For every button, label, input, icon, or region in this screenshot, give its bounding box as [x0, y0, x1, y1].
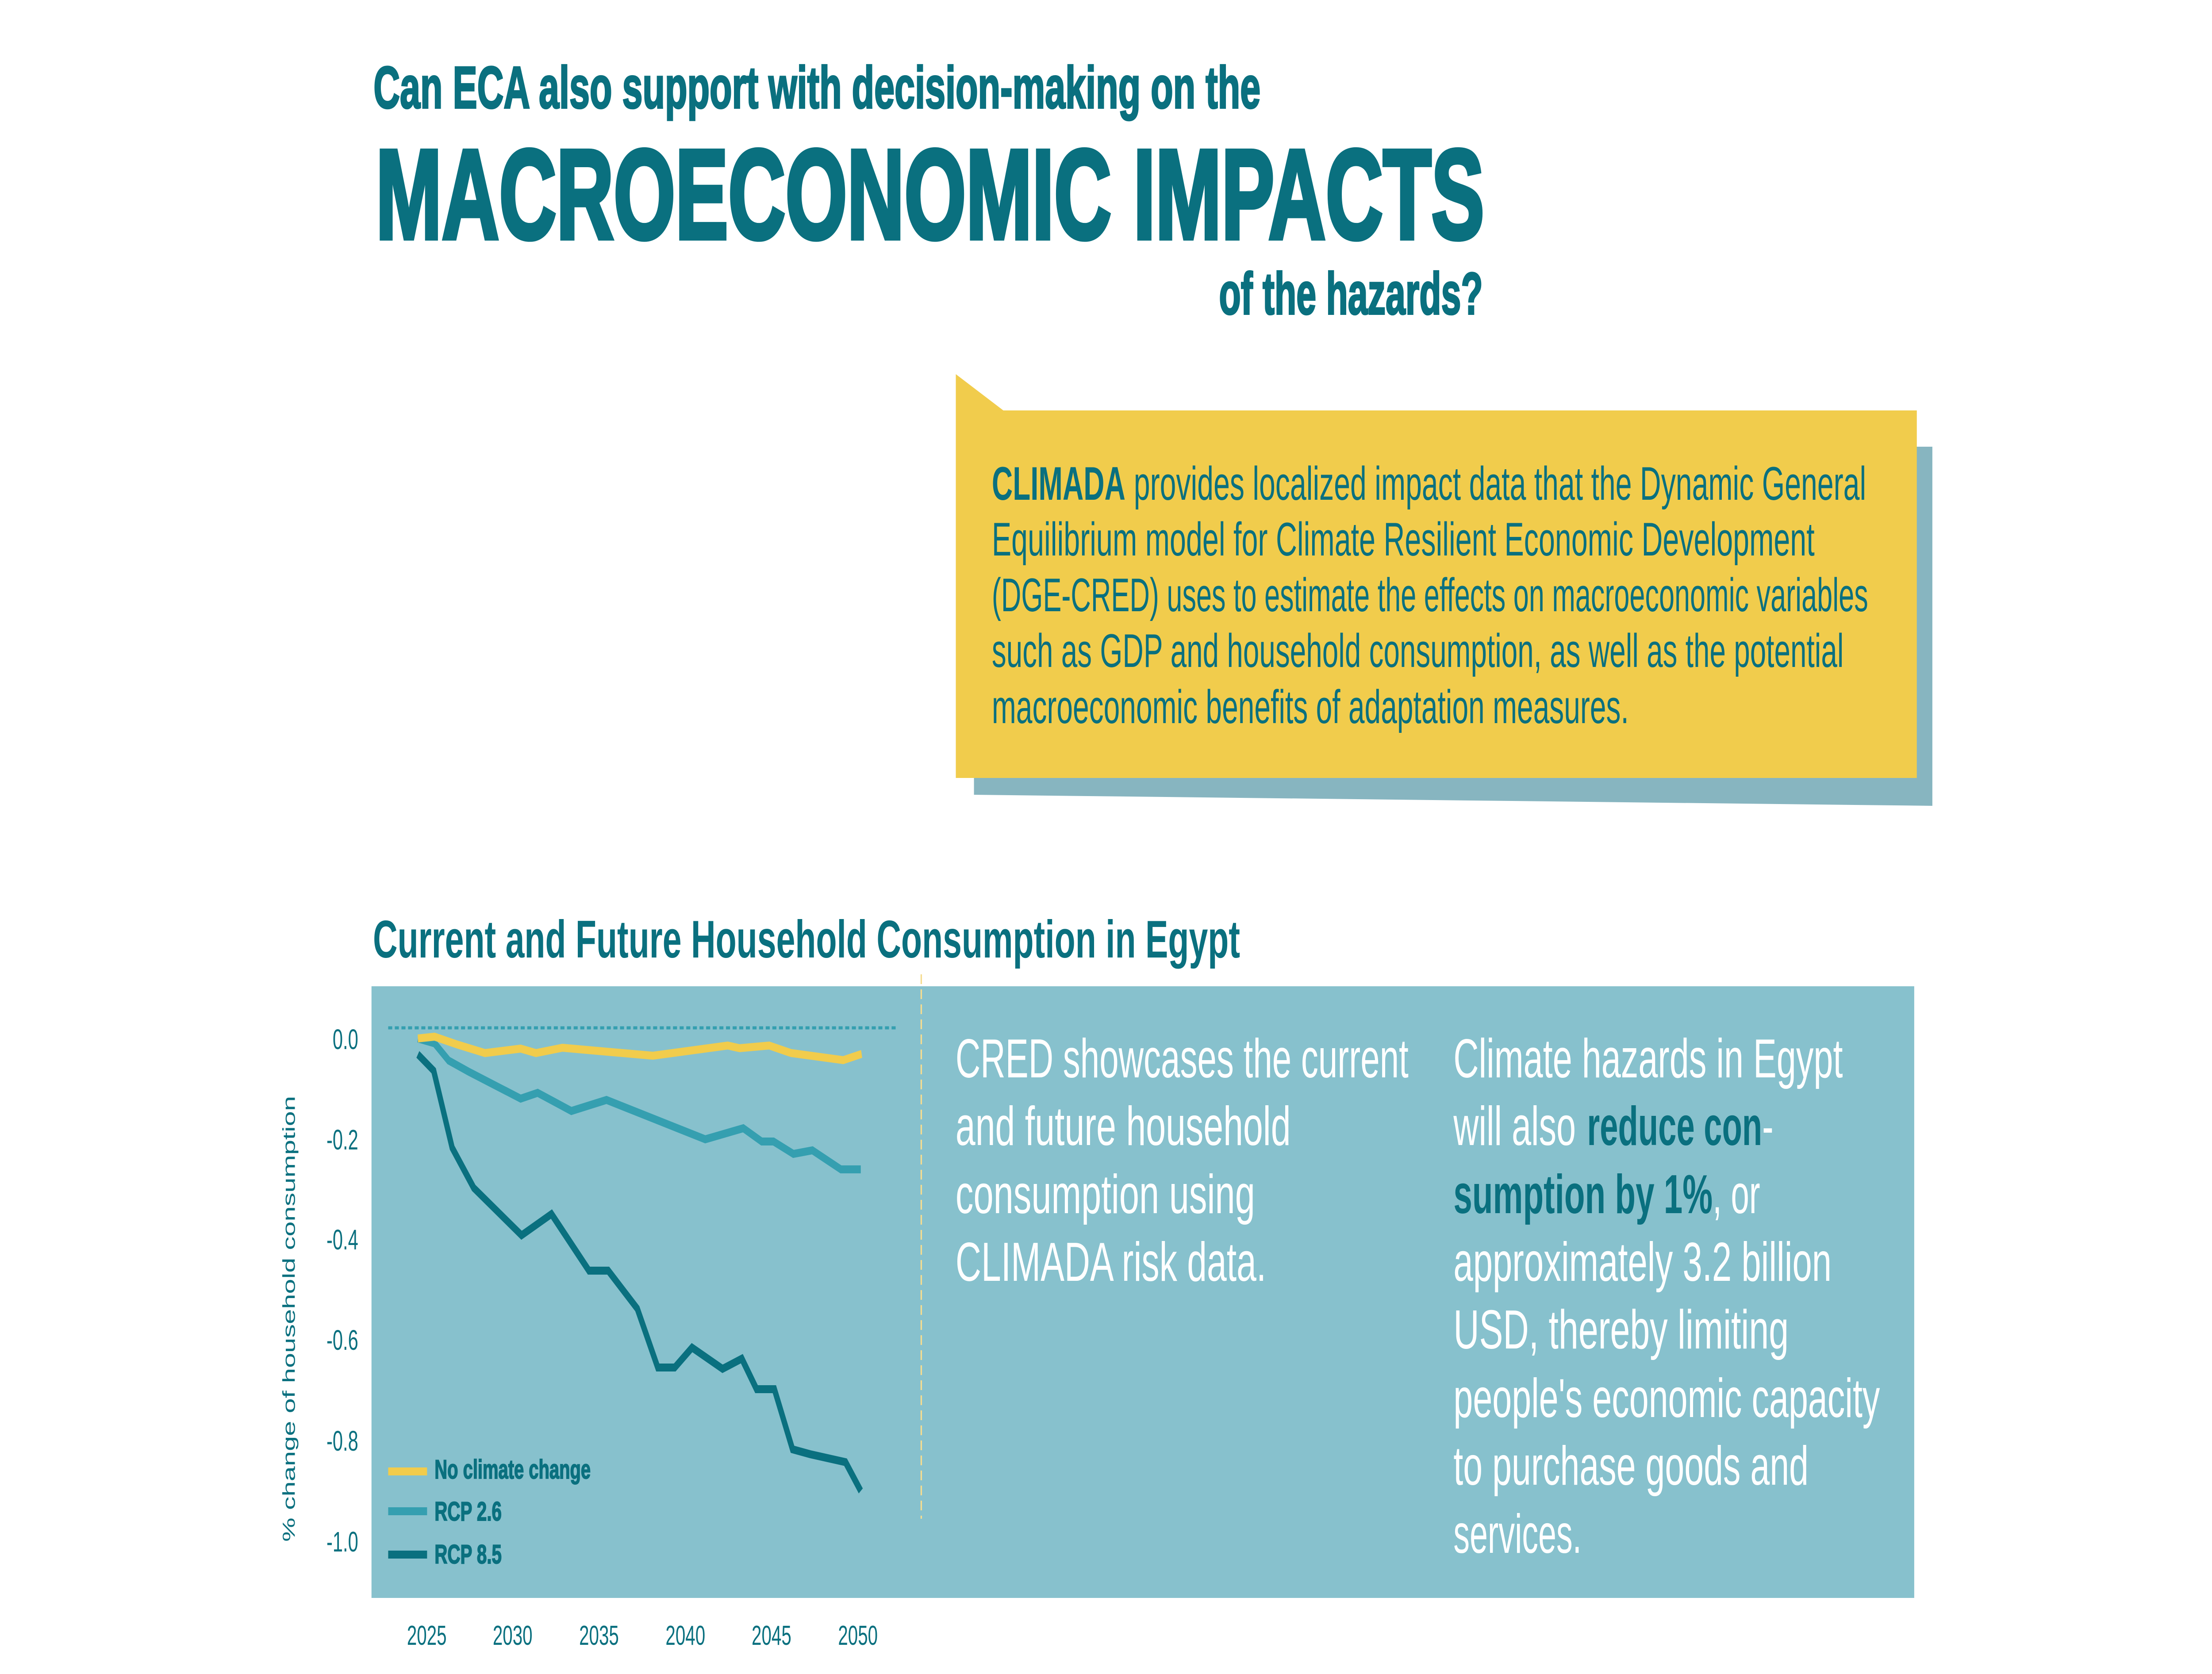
text block: climate hazards impact: will also	[1453, 1096, 1576, 1157]
y axis labels: -1.0	[326, 1526, 358, 1558]
text block: climate hazards impact: services.	[1453, 1504, 1582, 1565]
y axis title: % change of household consumption	[279, 1096, 299, 1542]
callout text: such as GDP and household consumption, as well as the potential	[992, 624, 1843, 678]
y axis labels: -0.2	[326, 1124, 358, 1156]
panel: chart and explanation background	[372, 986, 1914, 1598]
legend label: no climate change: No climate change	[434, 1454, 591, 1484]
callout speech box	[956, 374, 1917, 778]
x axis labels: 2045	[752, 1620, 791, 1651]
text block: climate hazards impact: , or	[1713, 1164, 1760, 1225]
callout text: (DGE-CRED) uses to estimate the effects on macroeconomic variables	[992, 569, 1868, 622]
legend swatch: RCP 2.6	[388, 1507, 427, 1515]
legend label: RCP 8.5: RCP 8.5	[434, 1539, 502, 1569]
callout text	[992, 457, 1868, 734]
zero reference line	[388, 1026, 896, 1030]
legend swatch: RCP 8.5	[388, 1551, 427, 1559]
text block: CRED explanation: CLIMADA risk data.	[956, 1232, 1266, 1293]
y axis labels: 0.0	[333, 1024, 358, 1055]
divider between chart and text	[920, 974, 922, 1519]
callout text: Equilibrium model for Climate Resilient Economic Development	[992, 513, 1815, 566]
y axis labels: -0.6	[326, 1325, 358, 1356]
title: main line: MACROECONOMIC IMPACTS	[376, 123, 1484, 266]
section heading: Current and Future Household Consumption in Egypt	[373, 910, 1240, 969]
y axis labels: -0.4	[326, 1224, 358, 1256]
y axis labels	[326, 1024, 358, 1558]
x axis labels: 2035	[579, 1620, 619, 1651]
series: RCP 8.5	[418, 1054, 861, 1491]
line chart	[279, 1024, 896, 1651]
x axis labels: 2025	[407, 1620, 447, 1651]
title block	[373, 54, 1484, 326]
title: lead-in line: Can ECA also support with decision-making on the	[373, 54, 1260, 120]
text block: climate hazards impact: USD, thereby limiting	[1453, 1299, 1789, 1360]
x axis labels	[407, 1620, 878, 1651]
text block: CRED explanation: CRED showcases the current	[956, 1028, 1409, 1089]
text block: climate hazards impact: approximately 3.2 billion	[1453, 1232, 1832, 1293]
text block: climate hazards impact: to purchase goods and	[1453, 1436, 1809, 1497]
text block: climate hazards impact: people's economic capacity	[1453, 1368, 1880, 1429]
callout text: CLIMADA	[992, 457, 1125, 510]
callout panel	[956, 374, 1932, 806]
y axis labels: -0.8	[326, 1425, 358, 1457]
x axis labels: 2040	[665, 1620, 705, 1651]
title: closing line: of the hazards?	[1219, 260, 1483, 326]
legend label: RCP 2.6: RCP 2.6	[434, 1496, 502, 1526]
text block: climate hazards impact	[1453, 1028, 1880, 1565]
x axis labels: 2030	[493, 1620, 533, 1651]
text block: climate hazards impact: -	[1762, 1096, 1774, 1157]
text block: CRED explanation: and future household	[956, 1096, 1291, 1157]
legend swatch: no climate change	[388, 1467, 427, 1475]
text block: climate hazards impact: sumption by 1%	[1453, 1164, 1713, 1225]
callout text: macroeconomic benefits of adaptation measures.	[992, 681, 1629, 734]
callout text: provides localized impact data that the Dynamic General	[1134, 457, 1866, 510]
callout shadow	[974, 447, 1932, 806]
x axis labels: 2050	[838, 1620, 878, 1651]
legend	[388, 1454, 591, 1569]
series: RCP 2.6	[418, 1038, 861, 1169]
text block: CRED explanation	[956, 1028, 1409, 1293]
text block: climate hazards impact: Climate hazards in Egypt	[1453, 1028, 1843, 1089]
text block: CRED explanation: consumption using	[956, 1164, 1255, 1225]
series: no climate change	[418, 1037, 862, 1060]
text block: climate hazards impact: reduce con	[1587, 1096, 1762, 1157]
